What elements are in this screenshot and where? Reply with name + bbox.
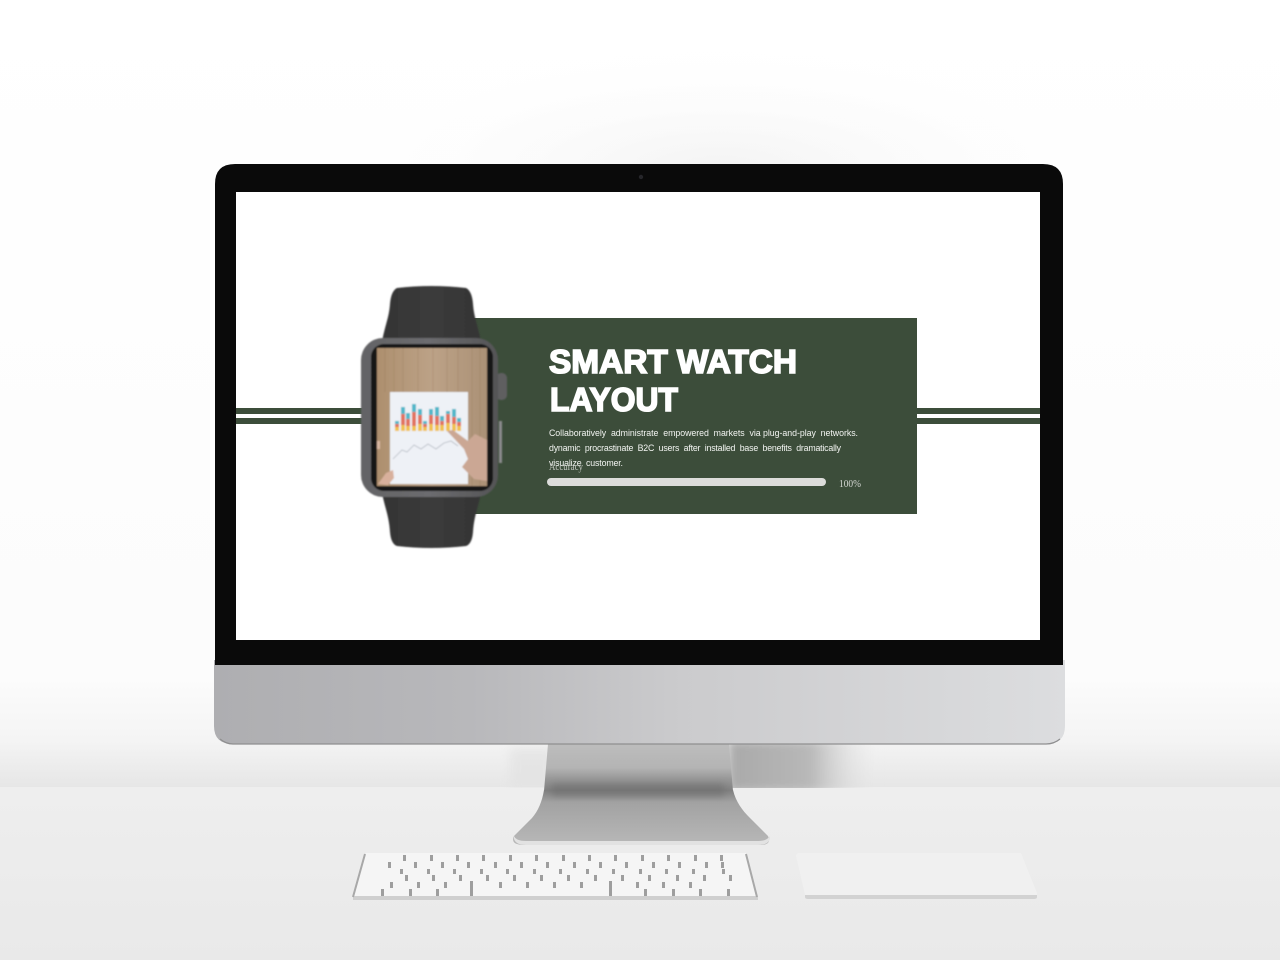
pointing hand (447, 430, 487, 481)
trackpad (796, 853, 1037, 899)
title: LAYOUT (550, 381, 678, 418)
smart watch (361, 286, 507, 548)
shadow behind monitor stand (516, 744, 856, 788)
body text: dynamic procrastinate B2C users after installed base benefits dramatically (549, 443, 842, 453)
progress label: Accuracy (549, 462, 584, 473)
body text (549, 428, 858, 468)
title: SMART WATCH (549, 343, 797, 380)
keyboard key gaps (381, 855, 732, 896)
camera (639, 175, 643, 179)
holding thumb (378, 470, 394, 485)
top strap (382, 286, 481, 342)
crown (496, 373, 507, 400)
trackpad edge (805, 895, 1037, 899)
monitor chin (214, 660, 1065, 744)
trackpad surface (796, 853, 1037, 895)
keyboard side edges (353, 854, 757, 897)
bottom strap (382, 493, 481, 548)
body text: visualize customer. (549, 458, 623, 468)
stand neck (544, 744, 733, 791)
keyboard (353, 853, 758, 900)
body text: Collaboratively administrate empowered markets via plug-and-play networks. (549, 428, 858, 438)
paper (390, 392, 468, 484)
watch case (361, 338, 498, 497)
progress value: 100% (839, 479, 861, 490)
progress bar (547, 478, 826, 486)
side button (499, 421, 502, 463)
chin bottom edge (220, 739, 1060, 744)
monitor stand (513, 744, 770, 845)
screen (236, 192, 1040, 640)
keyboard front edge (353, 896, 758, 900)
monitor (214, 164, 1065, 744)
monitor black bezel (215, 164, 1063, 665)
keyboard body (353, 853, 757, 898)
watch glass (371, 344, 493, 491)
bar chart (395, 404, 461, 431)
neck shadow band (552, 784, 724, 796)
stand foot (513, 790, 769, 845)
screen photo: wood (377, 348, 487, 486)
wood grain (385, 348, 480, 486)
decorative double stripes (236, 408, 1040, 424)
slide content (236, 286, 1040, 548)
title (549, 343, 797, 418)
left fingertip (377, 441, 380, 449)
foot edge highlight (514, 836, 770, 845)
line chart (393, 441, 458, 459)
green panel (470, 318, 917, 514)
